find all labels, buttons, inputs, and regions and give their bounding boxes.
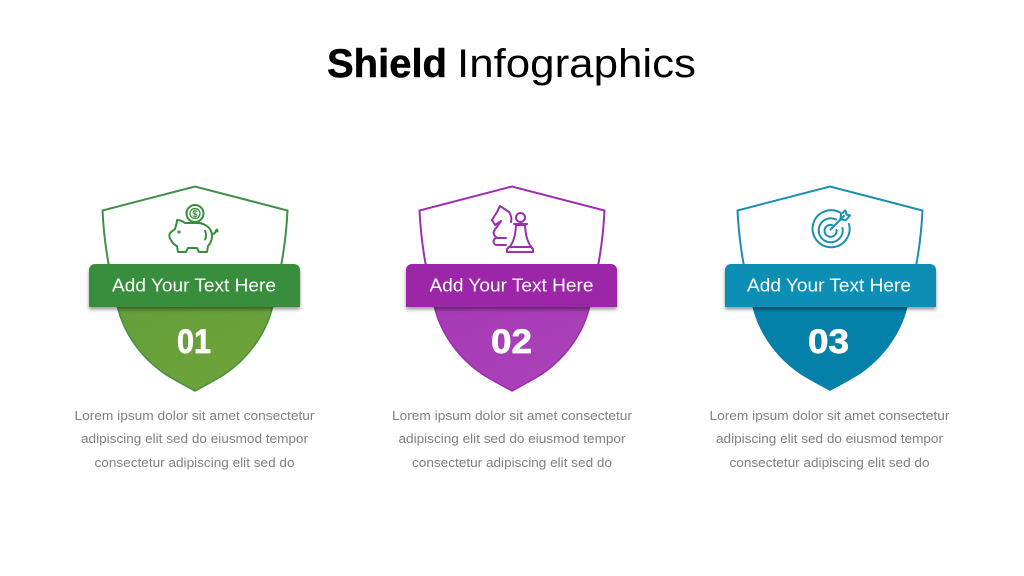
lower shield	[116, 300, 274, 391]
banner: Add Your Text Here	[747, 274, 911, 296]
icon: chess pieces	[492, 206, 533, 252]
lower shield	[751, 300, 909, 391]
description: consectetur adipiscing elit sed do	[412, 455, 612, 470]
description: consectetur adipiscing elit sed do	[730, 455, 930, 470]
description: adipiscing elit sed do eiusmod tempor	[398, 431, 626, 446]
description	[74, 408, 315, 470]
banner: Add Your Text Here	[430, 274, 594, 296]
lower shield	[433, 300, 591, 391]
panel: shield 02	[392, 186, 633, 470]
description: Lorem ipsum dolor sit amet consectetur	[710, 408, 950, 423]
title	[327, 42, 696, 86]
shield outline	[420, 186, 604, 266]
title: Shield	[327, 42, 447, 86]
number: 03	[808, 323, 849, 361]
banner	[725, 264, 936, 307]
icon: piggy bank	[169, 205, 218, 252]
description	[710, 408, 950, 470]
shield outline	[738, 186, 922, 266]
description: adipiscing elit sed do eiusmod tempor	[716, 431, 944, 446]
number: 02	[491, 323, 532, 361]
description: Lorem ipsum dolor sit amet consectetur	[392, 408, 633, 423]
icon: target	[813, 210, 850, 247]
description: adipiscing elit sed do eiusmod tempor	[81, 431, 309, 446]
banner: Add Your Text Here	[112, 274, 276, 296]
shield outline	[102, 186, 288, 266]
title: Infographics	[457, 42, 696, 86]
panel: shield 03	[710, 186, 950, 470]
banner	[89, 264, 300, 307]
panel: shield 01	[74, 186, 315, 470]
description	[392, 408, 633, 470]
description: consectetur adipiscing elit sed do	[94, 455, 294, 470]
description: Lorem ipsum dolor sit amet consectetur	[74, 408, 315, 423]
banner	[406, 264, 617, 307]
number: 01	[177, 323, 211, 361]
